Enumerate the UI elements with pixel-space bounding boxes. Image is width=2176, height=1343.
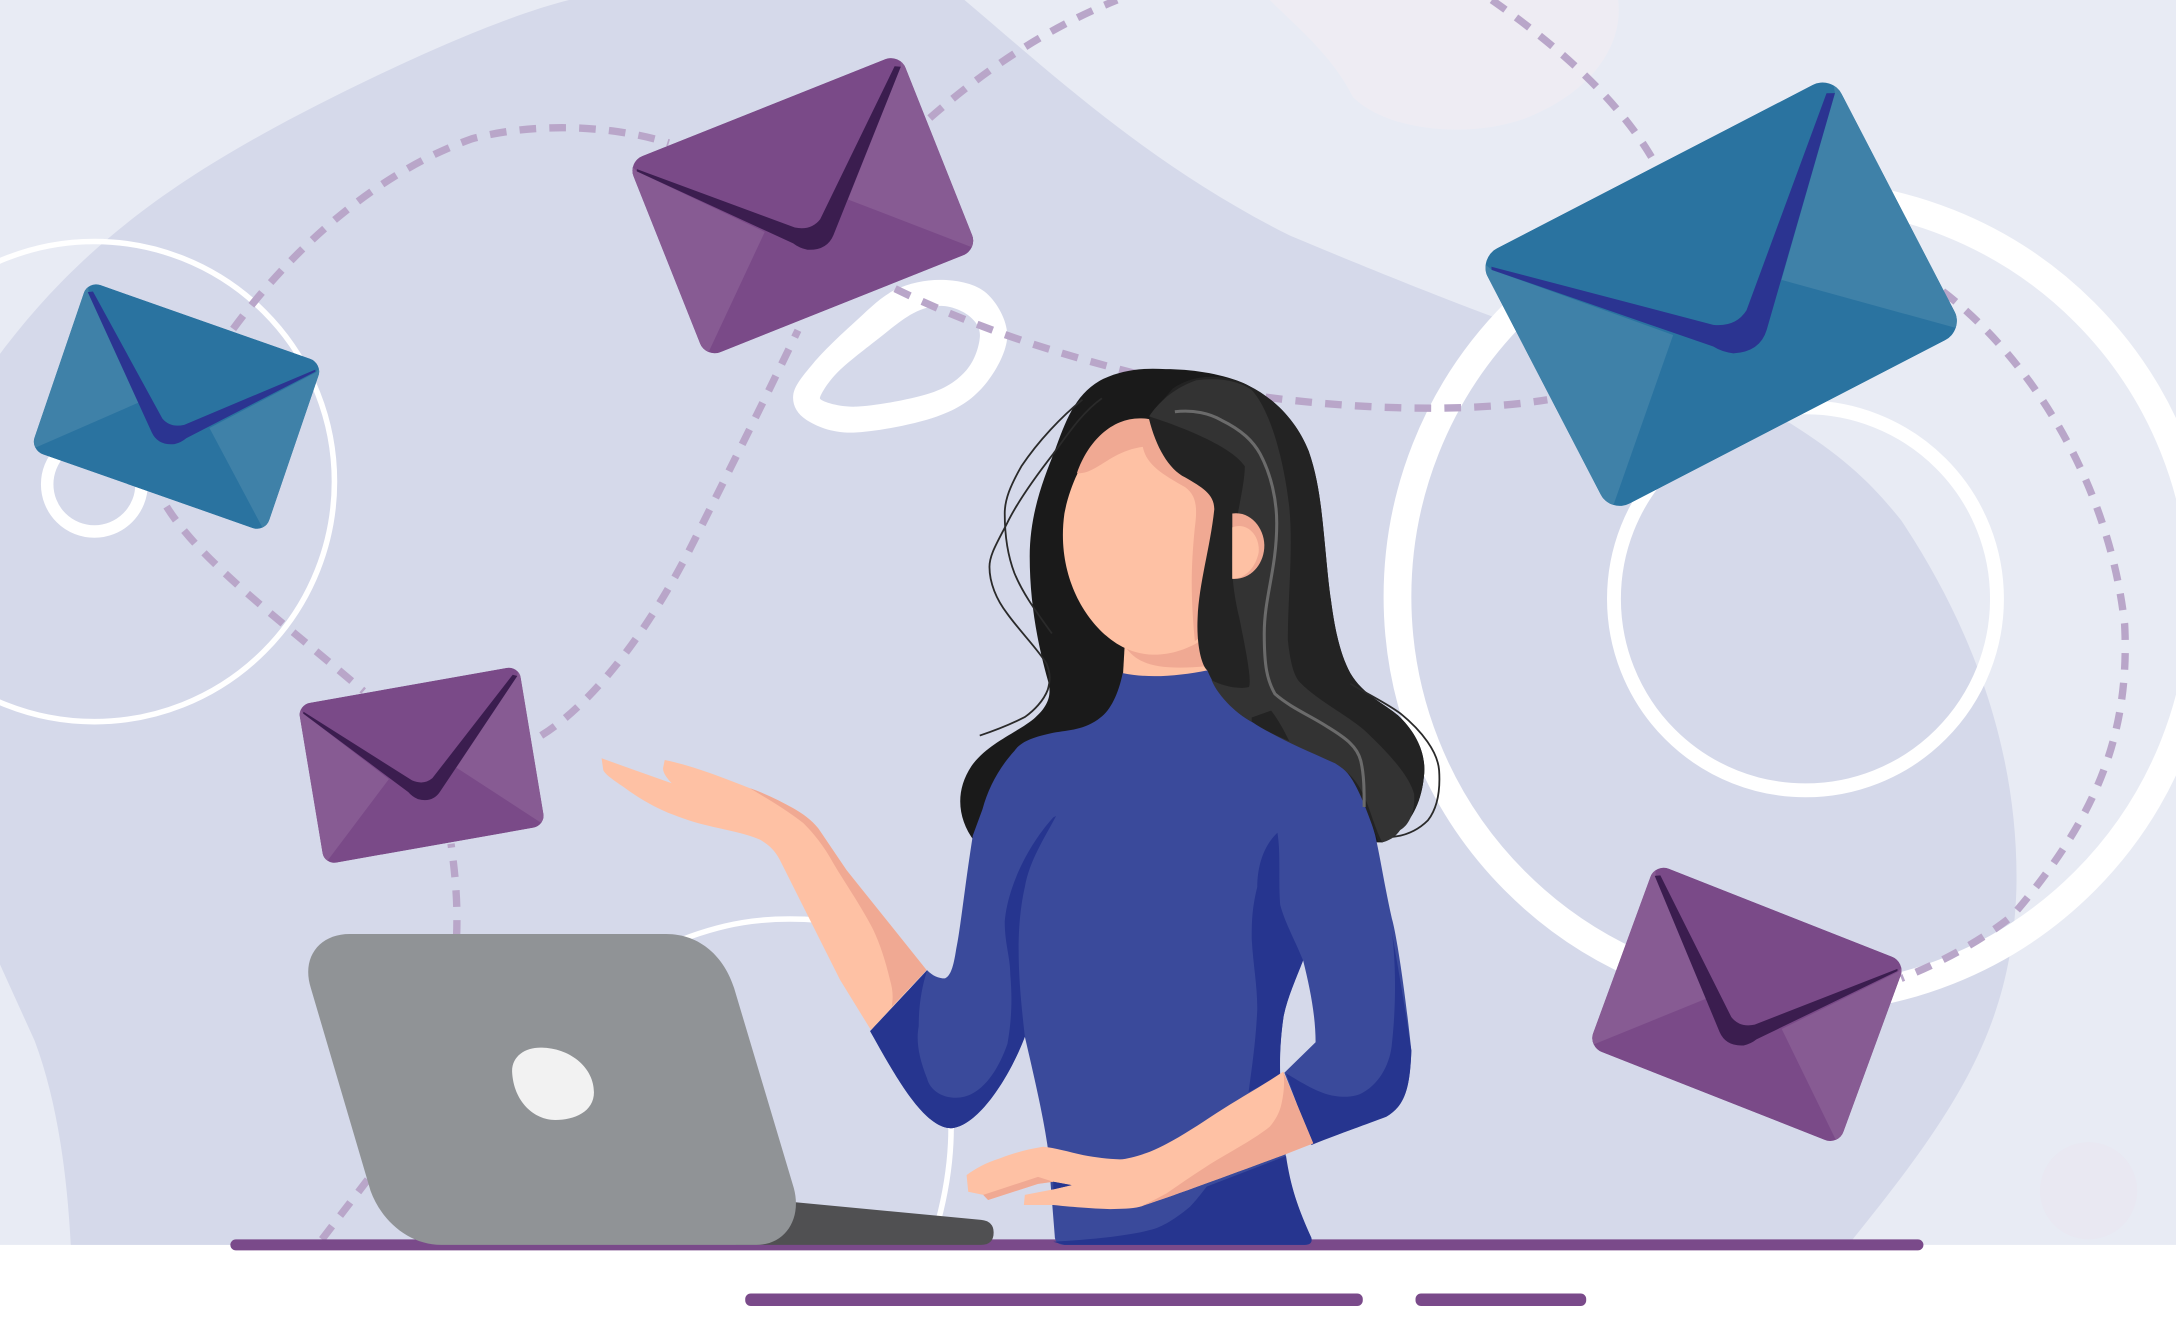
envelope: bottom right purple	[1588, 863, 1906, 1145]
envelope: large blue	[1478, 75, 1964, 513]
face	[1063, 420, 1221, 655]
hair shadow chunk	[1252, 711, 1289, 741]
left sleeve shading	[870, 816, 1056, 1128]
shirt	[870, 670, 1411, 1245]
lower arm and hand	[967, 1072, 1313, 1209]
face shadow	[1077, 418, 1224, 641]
raised arm and hand	[602, 758, 927, 1030]
right torso fold	[1249, 833, 1303, 1092]
raised arm shadow	[750, 788, 927, 1007]
text placeholder bar: long	[745, 1293, 1363, 1306]
white loop	[793, 280, 1007, 433]
background blob: pale pink top	[1270, 0, 1619, 130]
laptop lid	[308, 934, 796, 1245]
hair shine line	[1175, 411, 1364, 807]
white rings	[0, 194, 2176, 1221]
text placeholder bar: short	[1416, 1293, 1586, 1306]
laptop logo	[512, 1048, 594, 1120]
finger gap	[1053, 1182, 1072, 1189]
ear inner	[1232, 526, 1259, 579]
neck shadow	[1125, 627, 1207, 668]
neck	[1123, 625, 1210, 680]
ear	[1232, 513, 1264, 579]
woman	[602, 369, 1439, 1245]
lower arm shadow	[1140, 1072, 1313, 1207]
laptop base	[736, 1200, 994, 1245]
envelope: top purple	[628, 53, 978, 358]
laptop	[308, 934, 994, 1245]
envelope: middle purple	[298, 666, 545, 865]
right hair highlight	[1149, 379, 1414, 842]
background blob: pale pink circle	[2040, 1142, 2137, 1239]
back hair	[960, 369, 1424, 842]
stray hair strands	[980, 398, 1439, 837]
envelope: left blue	[30, 281, 323, 533]
right sleeve shading	[1286, 933, 1411, 1145]
right hair	[1149, 377, 1424, 842]
lower shirt shading	[1053, 1156, 1312, 1245]
finger shadow	[983, 1177, 1053, 1200]
desk line	[230, 1239, 1923, 1250]
